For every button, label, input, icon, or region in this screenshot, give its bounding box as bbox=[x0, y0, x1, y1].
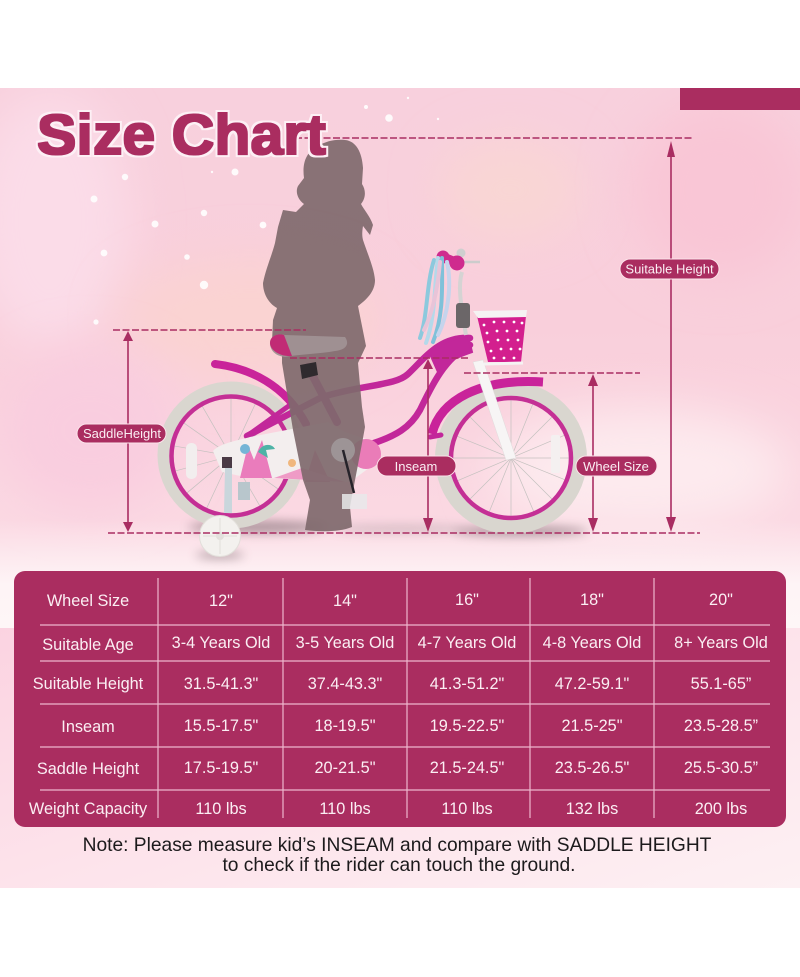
note: to check if the rider can touch the ground. bbox=[222, 855, 576, 876]
ground shadows bbox=[188, 521, 588, 558]
tassel bbox=[420, 258, 449, 343]
row: weight capacity: 132 lbs bbox=[566, 800, 618, 818]
label: saddle height bbox=[77, 424, 166, 443]
row: suitable height: 41.3-51.2" bbox=[430, 675, 505, 693]
row: inseam bbox=[61, 717, 758, 736]
title: Size Chart bbox=[37, 103, 326, 167]
label: saddle height: SaddleHeight bbox=[83, 426, 161, 441]
table panel bbox=[14, 571, 786, 827]
row: saddle height: 23.5-26.5" bbox=[555, 759, 630, 777]
label: suitable height bbox=[620, 259, 719, 279]
rear fender bbox=[215, 364, 306, 424]
row: suitable height: 37.4-43.3" bbox=[308, 675, 383, 693]
row: suitable age: 4-8 Years Old bbox=[543, 634, 641, 652]
row: inseam: Inseam bbox=[61, 718, 115, 736]
handlebar and stem bbox=[436, 248, 480, 335]
top right accent bar bbox=[680, 88, 800, 110]
row: saddle height bbox=[37, 759, 758, 778]
label: wheel size bbox=[576, 456, 657, 476]
row: inseam: 19.5-22.5" bbox=[430, 717, 505, 735]
row: saddle height: 17.5-19.5" bbox=[184, 759, 259, 777]
row: wheel size bbox=[47, 591, 733, 610]
row: inseam: 15.5-17.5" bbox=[184, 717, 259, 735]
row: saddle height: 25.5-30.5” bbox=[684, 759, 758, 777]
row: suitable age: 8+ Years Old bbox=[674, 634, 768, 652]
frame bbox=[247, 336, 472, 443]
row: saddle height: Saddle Height bbox=[37, 760, 140, 778]
row: suitable age: 3-4 Years Old bbox=[172, 634, 270, 652]
crank and pedal bbox=[331, 438, 367, 509]
arrow: inseam bbox=[423, 359, 433, 532]
row: wheel size: Wheel Size bbox=[47, 592, 129, 610]
seat post clamp bbox=[300, 362, 318, 379]
arrow: suitable height bbox=[666, 141, 676, 532]
row: saddle height: 20-21.5" bbox=[314, 759, 376, 777]
row: suitable height bbox=[33, 675, 751, 693]
arrow: wheel size bbox=[588, 374, 598, 532]
row: suitable age bbox=[42, 634, 768, 654]
row: suitable height: Suitable Height bbox=[33, 675, 144, 693]
row: wheel size: 20" bbox=[709, 591, 733, 609]
row: weight capacity: Weight Capacity bbox=[29, 800, 148, 818]
row: suitable age: 4-7 Years Old bbox=[418, 634, 516, 652]
basket bbox=[473, 310, 527, 364]
row: weight capacity bbox=[29, 800, 747, 818]
row: suitable height: 47.2-59.1" bbox=[555, 675, 630, 693]
label: inseam bbox=[377, 456, 456, 476]
row: inseam: 23.5-28.5” bbox=[684, 717, 758, 735]
chain guard mermaid decoration bbox=[240, 439, 381, 482]
note bbox=[83, 835, 712, 876]
saddle bbox=[270, 334, 347, 357]
row: wheel size: 14" bbox=[333, 592, 357, 610]
training wheel bbox=[200, 516, 240, 556]
table grid bbox=[40, 578, 770, 818]
bicycle bbox=[164, 336, 580, 556]
row: suitable height: 31.5-41.3" bbox=[184, 675, 259, 693]
label: wheel size: Wheel Size bbox=[583, 459, 649, 474]
row: wheel size: 16" bbox=[455, 591, 479, 609]
size table bbox=[14, 571, 786, 827]
label: inseam: Inseam bbox=[395, 459, 437, 474]
row: weight capacity: 110 lbs bbox=[195, 800, 247, 818]
row: saddle height: 21.5-24.5" bbox=[430, 759, 505, 777]
front fork bbox=[473, 360, 516, 460]
note: Note: Please measure kid’s INSEAM and compare with SADDLE HEIGHT bbox=[83, 835, 712, 856]
front wheel bbox=[442, 389, 580, 527]
front fender bbox=[432, 382, 543, 434]
row: inseam: 18-19.5" bbox=[314, 717, 376, 735]
row: suitable height: 55.1-65” bbox=[691, 675, 751, 693]
training wheel bracket bbox=[222, 457, 250, 513]
label: suitable height: Suitable Height bbox=[625, 262, 714, 276]
row: weight capacity: 110 lbs bbox=[441, 800, 493, 818]
rear wheel bbox=[164, 388, 298, 522]
row: weight capacity: 200 lbs bbox=[695, 800, 747, 818]
row: wheel size: 12" bbox=[209, 592, 233, 610]
measurement guide lines bbox=[108, 138, 700, 533]
chain guard bbox=[213, 422, 373, 482]
row: weight capacity: 110 lbs bbox=[319, 800, 371, 818]
child silhouette bbox=[263, 140, 375, 531]
row: inseam: 21.5-25" bbox=[562, 717, 623, 735]
snow dots bbox=[90, 97, 439, 325]
row: suitable age: 3-5 Years Old bbox=[296, 634, 394, 652]
row: suitable age: Suitable Age bbox=[42, 636, 134, 654]
row: wheel size: 18" bbox=[580, 591, 604, 609]
arrow: saddle height bbox=[123, 331, 133, 532]
